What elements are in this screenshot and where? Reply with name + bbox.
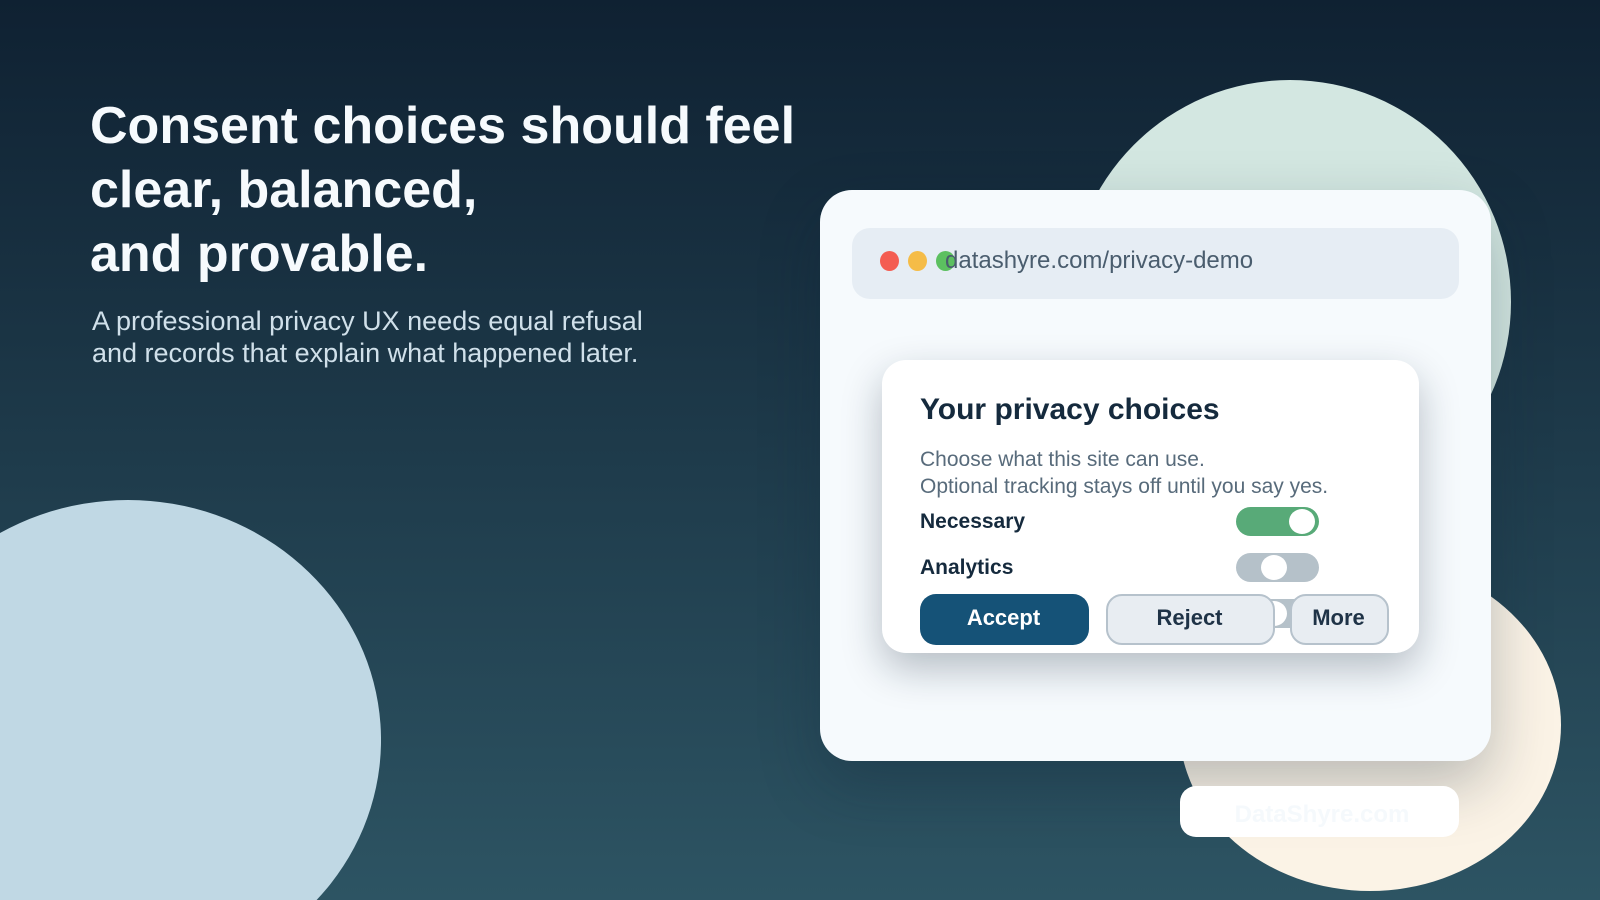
decorative circle: bottom right cream bbox=[1179, 559, 1561, 891]
icon: yellow window dot bbox=[908, 251, 927, 271]
decorative circle: left blue bbox=[0, 500, 381, 900]
toggle: third option off, partly hidden bbox=[1236, 599, 1319, 628]
title: and provable. bbox=[90, 225, 428, 283]
button: reject: Reject bbox=[1156, 605, 1223, 630]
decorative circle: top right mint bbox=[1069, 80, 1511, 524]
address bar URL: datashyre.com/privacy-demo bbox=[945, 247, 1253, 274]
dialog heading: Your privacy choices bbox=[920, 393, 1220, 426]
button: accept: Accept bbox=[967, 605, 1040, 630]
subtitle: and records that explain what happened later. bbox=[92, 338, 638, 368]
title: Consent choices should feel bbox=[90, 97, 795, 155]
button: more: More bbox=[1312, 605, 1365, 630]
dialog description bbox=[920, 448, 1328, 498]
browser address bar bbox=[852, 228, 1459, 299]
footer pill: brand bbox=[1180, 786, 1459, 837]
panel: browser window bbox=[820, 190, 1491, 761]
toggle: necessary on bbox=[1236, 507, 1319, 536]
toggle: analytics off bbox=[1236, 553, 1319, 582]
button: more bbox=[1290, 594, 1389, 645]
subtitle bbox=[92, 306, 643, 368]
subtitle: A professional privacy UX needs equal refusal bbox=[92, 306, 643, 336]
icon: red window dot bbox=[880, 251, 899, 271]
dialog description: Optional tracking stays off until you say yes. bbox=[920, 475, 1328, 498]
title: clear, balanced, bbox=[90, 161, 477, 219]
dialog description: Choose what this site can use. bbox=[920, 448, 1205, 471]
icon: green window dot bbox=[936, 251, 955, 271]
label: analytics: Analytics bbox=[920, 556, 1013, 579]
label: necessary: Necessary bbox=[920, 510, 1025, 533]
button: accept bbox=[920, 594, 1089, 645]
panel: privacy dialog bbox=[882, 360, 1419, 653]
button: reject bbox=[1106, 594, 1275, 645]
footer pill: brand: DataShyre.com bbox=[1235, 801, 1409, 828]
title bbox=[90, 97, 795, 283]
